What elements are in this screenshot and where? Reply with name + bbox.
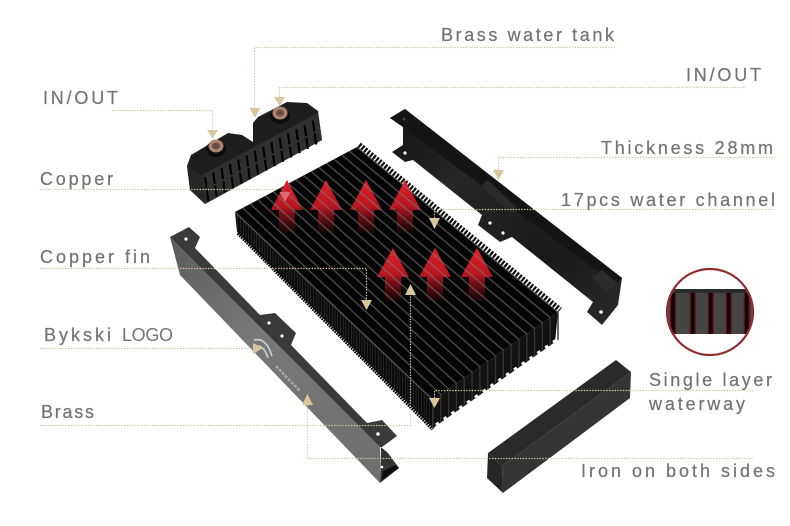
label: Single layer waterway: Single layer [649,370,772,390]
label: Iron on both sides: Iron on both sides [581,461,775,481]
screw right [270,106,290,124]
dotted leader lines [40,48,776,458]
label: Thickness 28mm: Thickness 28mm [601,138,773,158]
fin ends [433,312,558,428]
label: Copper: Copper [40,169,113,189]
label: Brass water tank: Brass water tank [441,25,615,45]
water tank [187,102,322,204]
label: Bykski LOGO [44,325,173,345]
label: IN/OUT left: IN/OUT [43,88,118,108]
label: Single layer waterway [648,370,772,414]
label: Bykski LOGO: LOGO [122,325,173,345]
water channel stripes [235,147,558,400]
red flow arrows [271,180,493,301]
right brass bracket [390,109,622,325]
magnified waterway circle [660,269,760,355]
label: Single layer waterway: waterway [648,394,745,414]
label: Copper fin: Copper fin [40,247,150,267]
label: IN/OUT right: IN/OUT [686,65,761,85]
label: 17pcs water channel: 17pcs water channel [561,190,775,210]
iron side bar [487,360,631,493]
label: Bykski LOGO: Bykski [44,325,111,345]
logo on bracket [254,340,300,391]
label: Brass: Brass [41,402,94,422]
screw left [206,140,226,157]
leader arrowheads [207,97,504,408]
radiator core with fins [235,145,560,429]
left brass bracket [170,227,399,483]
